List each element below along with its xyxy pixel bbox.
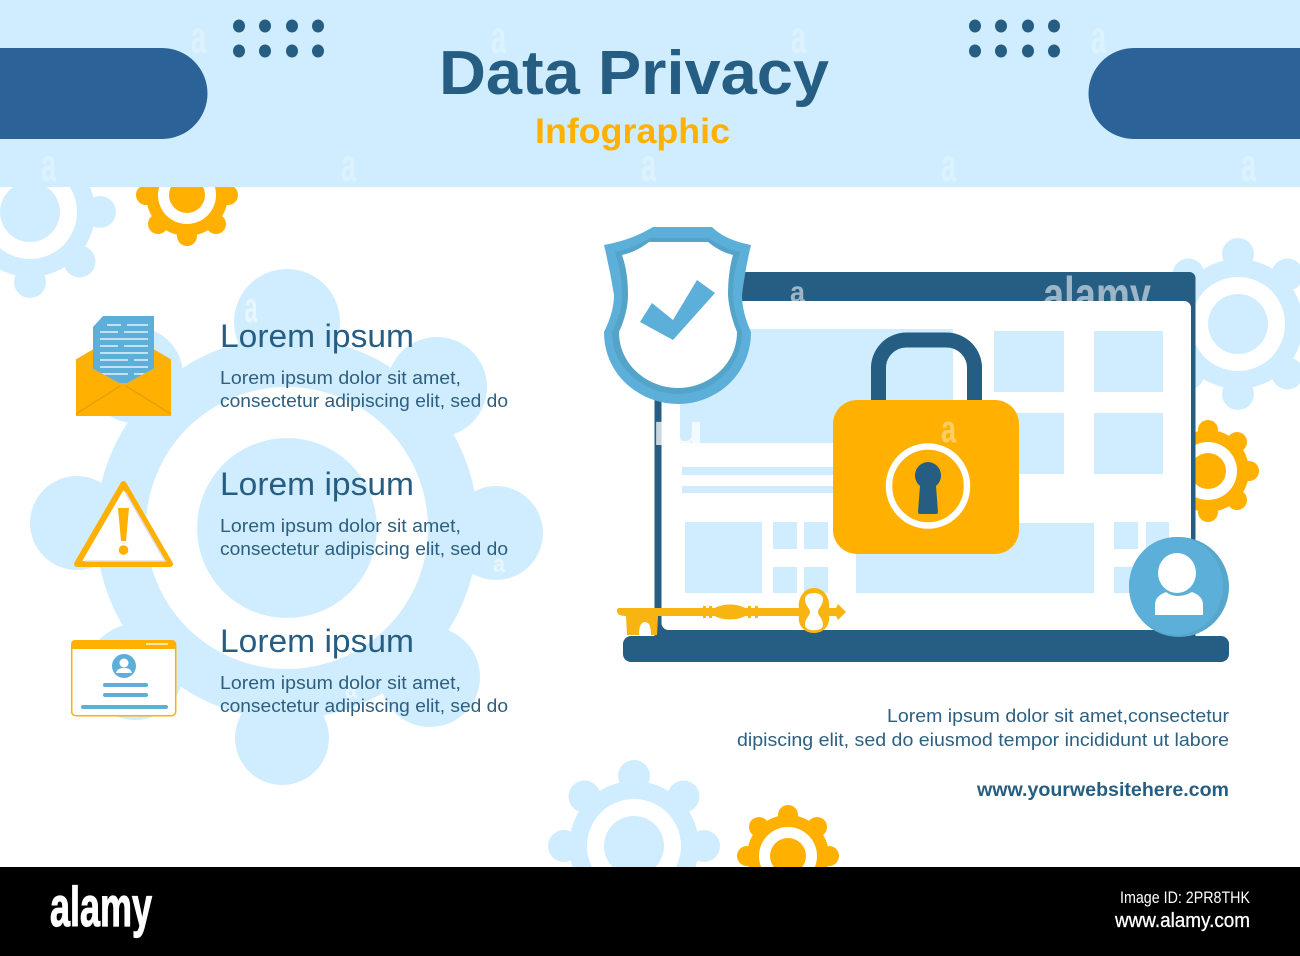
laptop illustration [623,267,1229,662]
gear: large background: a [493,551,506,578]
title: Data Privacy [439,39,830,108]
gear: large background: a [345,672,357,705]
description: Lorem ipsum dolor sit amet, [220,672,461,693]
watermark letters: a [791,11,806,63]
left dots [233,20,324,58]
left pill [0,48,208,139]
watermark letters: a [1241,139,1256,191]
watermark letters: a [1091,11,1106,63]
watermark letters: a [41,139,56,191]
gear: right blue [1152,238,1300,410]
watermark on screen edge: ıu [652,406,704,455]
watermark on top bar: alamy [1043,267,1151,323]
gear: top left blue [0,126,116,298]
icon: envelope with document [76,316,171,416]
item 1: email [76,316,508,416]
gear: right orange [1157,420,1259,522]
description: consectetur adipiscing elit, sed do [220,695,508,716]
description [220,515,508,559]
item 2: warning [77,466,508,564]
watermark letters: a [191,11,206,63]
footer bar [0,867,1300,956]
description: consectetur adipiscing elit, sed do [220,390,508,411]
icon: login window [71,640,176,716]
description: Lorem ipsum dolor sit amet, [220,515,461,536]
heading: Lorem ipsum [220,466,414,502]
key [617,588,846,635]
shackle [878,340,975,402]
description [220,672,508,716]
gear: large background [30,269,543,785]
image id: Image ID: 2PR8THK [1120,888,1251,907]
subtitle: Infographic [535,112,730,151]
icon: warning triangle [77,484,170,564]
lock body [833,400,1019,554]
right pill [1088,48,1300,139]
watermark letters: a [941,139,956,191]
watermark letters [41,11,1256,191]
paragraph: right [737,705,1229,750]
website url: www.yourwebsitehere.com [976,780,1229,801]
website: www.alamy.com [1114,910,1250,932]
watermark letters: a [341,139,356,191]
screen content blocks [680,329,1169,593]
laptop base [623,636,1229,662]
heading: Lorem ipsum [220,623,414,659]
user avatar badge [1129,537,1229,637]
keyhole ring [889,446,967,526]
check mark [640,280,715,340]
gear: bottom orange [737,805,839,907]
heading: Lorem ipsum [220,318,414,354]
item 3: login [71,623,508,716]
padlock: a [941,409,957,451]
gear: top left orange [136,144,238,246]
description [220,367,508,411]
watermark letters: a [491,11,506,63]
laptop screen [661,301,1191,630]
right dots [969,20,1060,58]
header band [0,0,1300,191]
watermark on top bar [790,276,1151,301]
description: consectetur adipiscing elit, sed do [220,538,508,559]
shield with check [604,227,751,404]
laptop screen frame [654,272,1196,640]
gear: bottom blue [548,760,720,932]
logo: alamy [50,875,152,938]
padlock [833,340,1019,554]
keyhole [915,462,941,514]
description: Lorem ipsum dolor sit amet, [220,367,461,388]
gear: large background: a [244,283,258,332]
watermark on top bar: a [790,276,805,309]
paragraph: right: Lorem ipsum dolor sit amet,consectetur [887,705,1229,726]
watermark letters: a [641,139,656,191]
paragraph: right: dipiscing elit, sed do eiusmod tempor incididunt ut labore [737,729,1229,750]
